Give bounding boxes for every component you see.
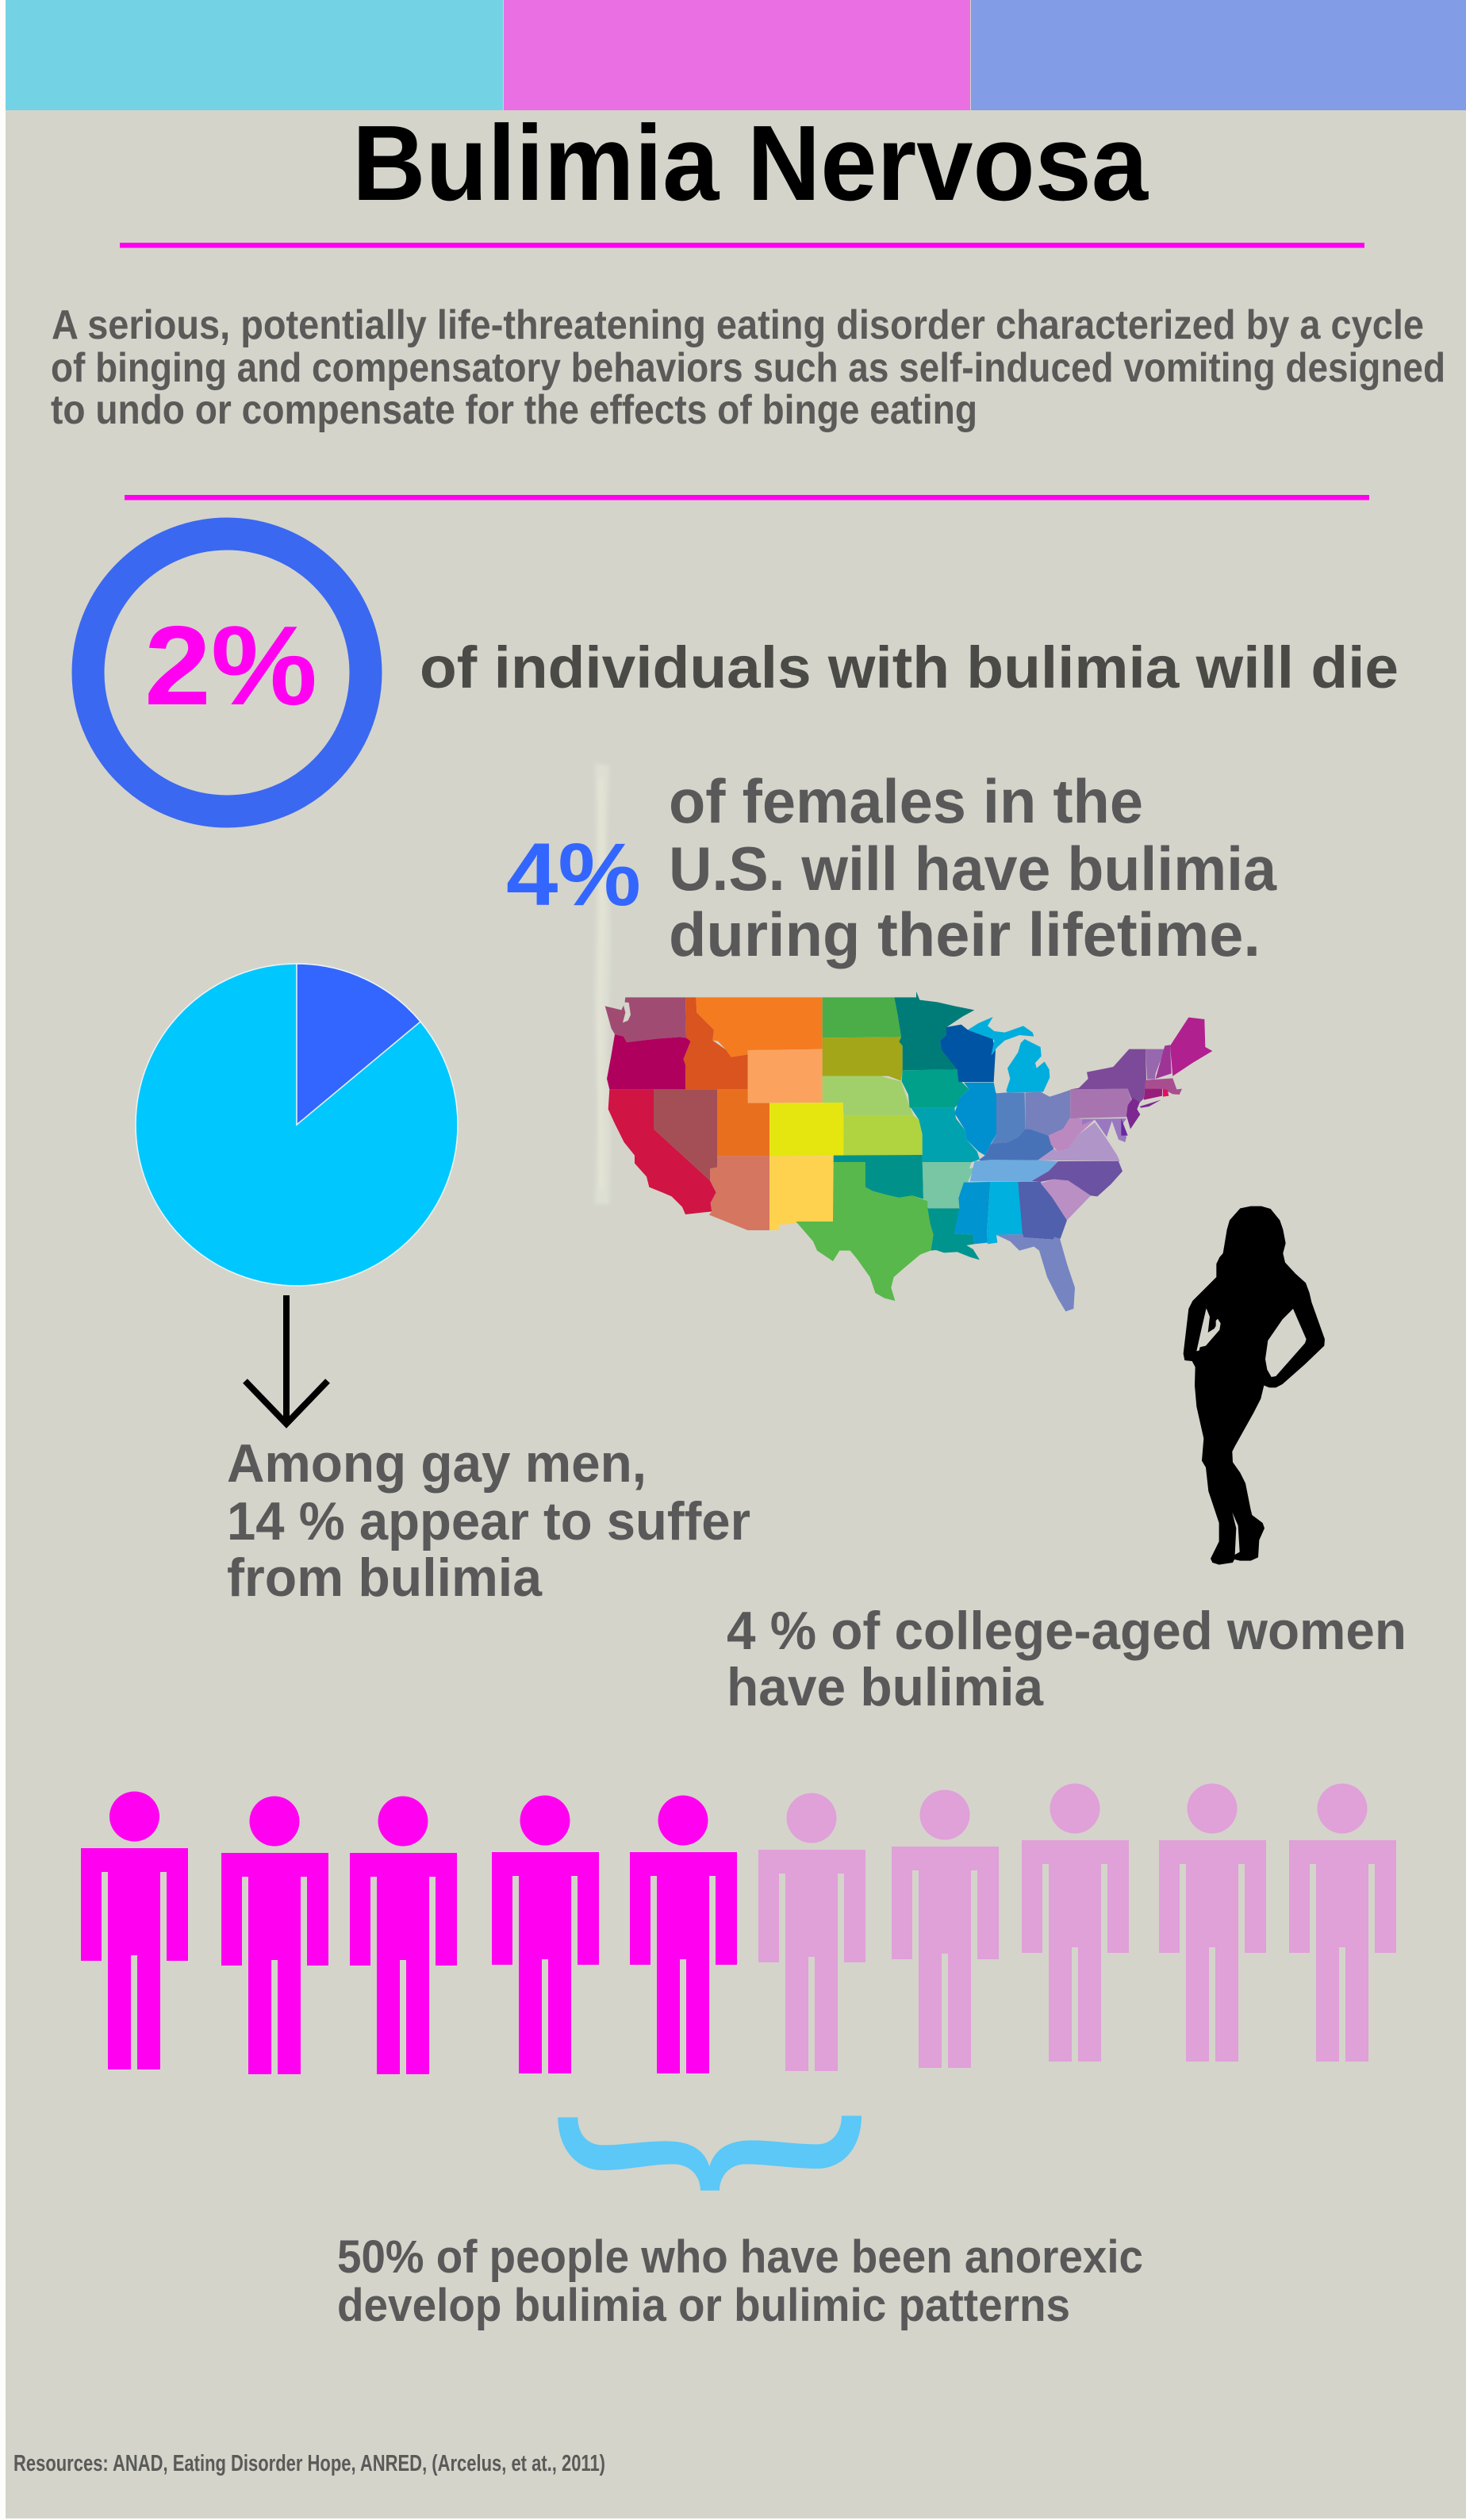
Kansas — [843, 1116, 923, 1156]
person 10 faded — [1289, 1783, 1396, 2062]
stat text: anorexic: 50% of people who have been anorexic — [337, 2231, 1143, 2283]
stat text: gay men: Among gay men, — [227, 1433, 647, 1494]
stat text: females in the US — [669, 766, 1277, 969]
person 6 faded — [758, 1793, 865, 2071]
Arkansas — [923, 1162, 974, 1208]
Indiana — [992, 1092, 1025, 1144]
Iowa — [902, 1069, 969, 1108]
New York — [1070, 1049, 1146, 1105]
Wisconsin — [940, 1025, 996, 1082]
Washington — [605, 997, 686, 1042]
Massachusetts — [1145, 1078, 1182, 1095]
Mississippi — [954, 1182, 990, 1244]
Minnesota — [894, 992, 974, 1070]
textured vertical strip — [594, 763, 611, 1204]
stat text: gay men: 14 % appear to suffer — [227, 1491, 750, 1552]
person 5 highlighted — [630, 1796, 737, 2073]
Rhode Island — [1163, 1089, 1169, 1097]
Delaware — [1121, 1118, 1128, 1136]
stat: 2 percent ring: 2% — [144, 603, 317, 729]
stat text: anorexic — [337, 2231, 1143, 2331]
New Jersey — [1126, 1098, 1140, 1129]
New Hampshire — [1156, 1045, 1172, 1079]
stat text: females in the US: during their lifetime. — [669, 899, 1261, 969]
Oklahoma — [834, 1155, 923, 1199]
Colorado — [769, 1103, 843, 1156]
Texas — [796, 1162, 934, 1301]
Idaho — [684, 997, 748, 1089]
Nebraska — [823, 1076, 914, 1116]
stat text: gay men — [227, 1433, 750, 1608]
Connecticut — [1144, 1089, 1162, 1100]
South Carolina — [1041, 1179, 1091, 1220]
second divider — [125, 495, 1369, 500]
western states — [605, 997, 934, 1301]
Long Island — [1140, 1100, 1161, 1108]
California — [608, 1089, 716, 1214]
description text — [51, 302, 1445, 433]
Maine — [1170, 1018, 1212, 1076]
title: Bulimia Nervosa — [352, 103, 1149, 223]
Florida — [996, 1234, 1075, 1311]
pie chart: 14 percent — [136, 964, 458, 1286]
stat: 4 percent number: 4% — [506, 825, 641, 924]
Virginia — [1038, 1122, 1120, 1161]
Georgia — [1018, 1182, 1067, 1240]
person 7 faded — [892, 1789, 999, 2068]
Puget Sound — [623, 1002, 631, 1022]
Arizona — [709, 1156, 769, 1230]
top colour bands — [6, 0, 1466, 110]
person 4 highlighted — [492, 1796, 599, 2073]
North Dakota — [823, 997, 901, 1038]
Maryland — [1082, 1118, 1126, 1142]
North Carolina — [1031, 1161, 1123, 1196]
stat text: gay men: from bulimia — [227, 1548, 543, 1608]
stat text: college-aged women: have bulimia — [727, 1657, 1044, 1717]
Kentucky — [980, 1129, 1053, 1160]
person 2 highlighted — [221, 1796, 328, 2074]
South Dakota — [823, 1037, 903, 1081]
icon: woman silhouette — [1184, 1206, 1325, 1565]
stat text: individuals who die: of individuals with bulimia will die — [420, 635, 1399, 700]
Nevada — [654, 1089, 717, 1180]
pictogram: ten people — [81, 1783, 1396, 2074]
Alabama — [987, 1182, 1024, 1244]
Vermont — [1146, 1049, 1165, 1080]
Montana — [696, 997, 823, 1057]
stat text: anorexic: develop bulimia or bulimic patterns — [337, 2280, 1070, 2331]
Missouri — [911, 1108, 980, 1162]
stat: 2 percent ring — [88, 534, 366, 811]
US map — [605, 992, 1212, 1311]
curly brace — [558, 2115, 862, 2191]
West Virginia — [1049, 1117, 1095, 1152]
person 8 faded — [1022, 1783, 1129, 2062]
person 9 faded — [1159, 1783, 1266, 2062]
Tennessee — [970, 1160, 1058, 1182]
stat text: females in the US: U.S. will have bulimia — [669, 834, 1277, 903]
Utah — [717, 1089, 769, 1156]
description text: to undo or compensate for the effects of binge eating — [51, 387, 977, 433]
Wyoming — [748, 1049, 823, 1103]
Pennsylvania — [1070, 1089, 1131, 1118]
eastern states — [894, 992, 1212, 1311]
Oregon — [607, 1034, 691, 1089]
New Mexico — [769, 1156, 833, 1230]
arrow down — [245, 1295, 328, 1424]
resources footnote: Resources: ANAD, Eating Disorder Hope, ANRED, (Arcelus, et at., 2011) — [13, 2451, 605, 2476]
stat text: college-aged women: 4 % of college-aged women — [727, 1601, 1407, 1661]
stat text: females in the US: of females in the — [669, 766, 1143, 836]
stat text: college-aged women — [727, 1601, 1407, 1717]
top divider — [120, 243, 1364, 247]
Michigan — [968, 1017, 1050, 1092]
person 3 highlighted — [350, 1796, 457, 2074]
person 1 highlighted — [81, 1791, 188, 2069]
Ohio — [1025, 1090, 1070, 1136]
Illinois — [954, 1083, 996, 1156]
Louisiana — [927, 1208, 980, 1260]
